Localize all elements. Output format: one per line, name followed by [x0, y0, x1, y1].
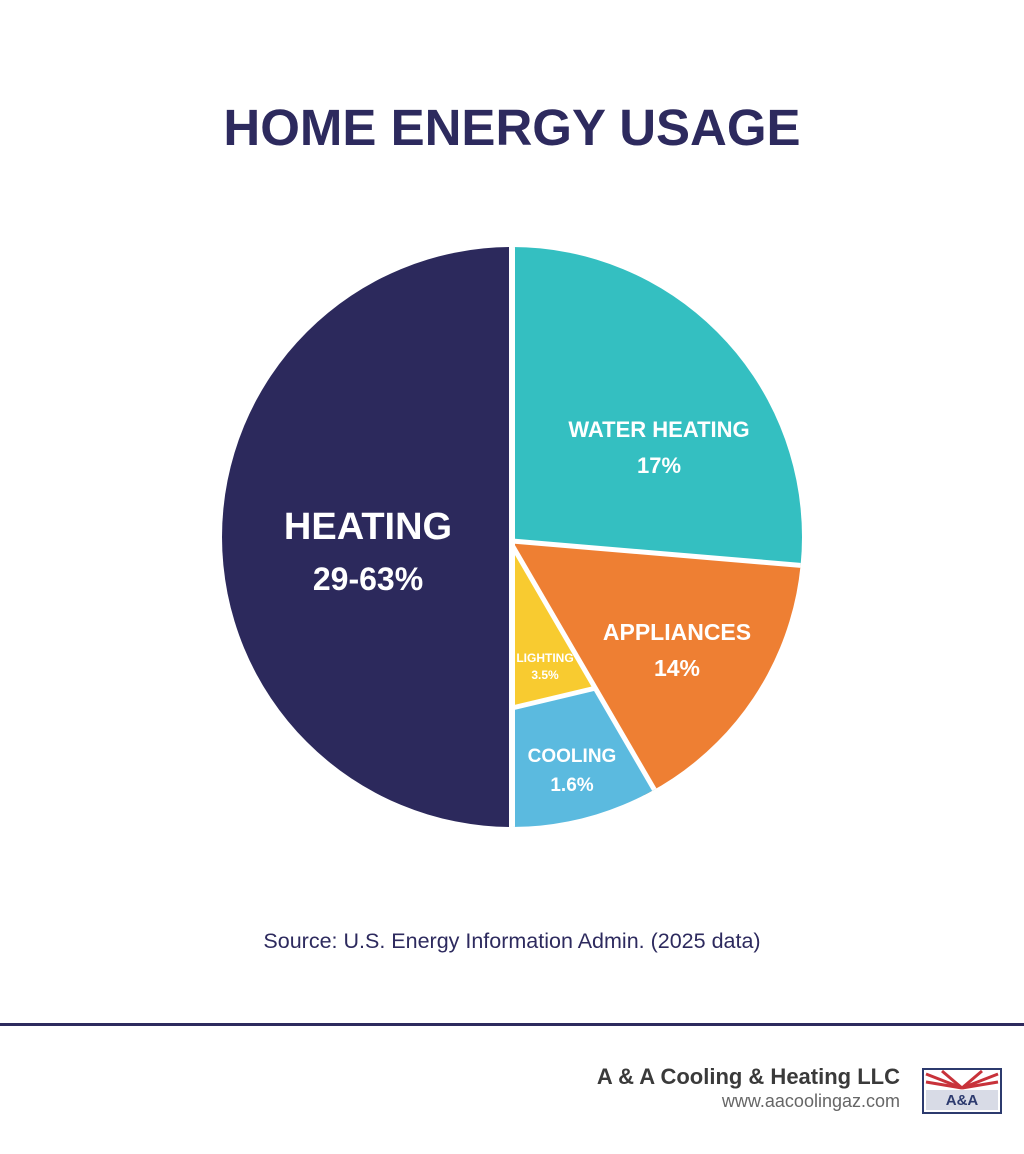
- footer company text: [597, 1064, 900, 1111]
- footer company text: www.aacoolingaz.com: [722, 1091, 900, 1111]
- pie chart: [222, 247, 802, 827]
- footer company text: A & A Cooling & Heating LLC: [597, 1064, 900, 1089]
- label: appliances: 14%: [654, 655, 700, 681]
- label: water heating: 17%: [637, 453, 681, 478]
- label: appliances: APPLIANCES: [603, 619, 751, 645]
- slice: appliances: [515, 544, 801, 795]
- slice: cooling: [513, 691, 654, 827]
- source text: Source: U.S. Energy Information Admin. (2025 data): [263, 929, 761, 953]
- label: cooling: COOLING: [528, 746, 616, 767]
- logo: A&A: [946, 1092, 978, 1109]
- label: heating: 29-63%: [313, 561, 423, 597]
- slice: lighting: [515, 555, 592, 705]
- logo: [922, 1068, 1002, 1114]
- label: heating: [284, 506, 452, 597]
- label: heating: HEATING: [284, 506, 452, 548]
- label: cooling: [528, 746, 616, 796]
- footer divider: [0, 1023, 1024, 1026]
- slice: heating: [222, 247, 509, 827]
- label: lighting: LIGHTING: [516, 651, 574, 665]
- label: water heating: [568, 417, 750, 478]
- slice: water heating: [513, 247, 802, 564]
- title: HOME ENERGY USAGE: [223, 99, 801, 156]
- label: water heating: WATER HEATING: [568, 417, 750, 442]
- label: cooling: 1.6%: [550, 775, 594, 796]
- label: appliances: [603, 619, 751, 681]
- label: lighting: [516, 651, 574, 682]
- label: lighting: 3.5%: [531, 668, 559, 682]
